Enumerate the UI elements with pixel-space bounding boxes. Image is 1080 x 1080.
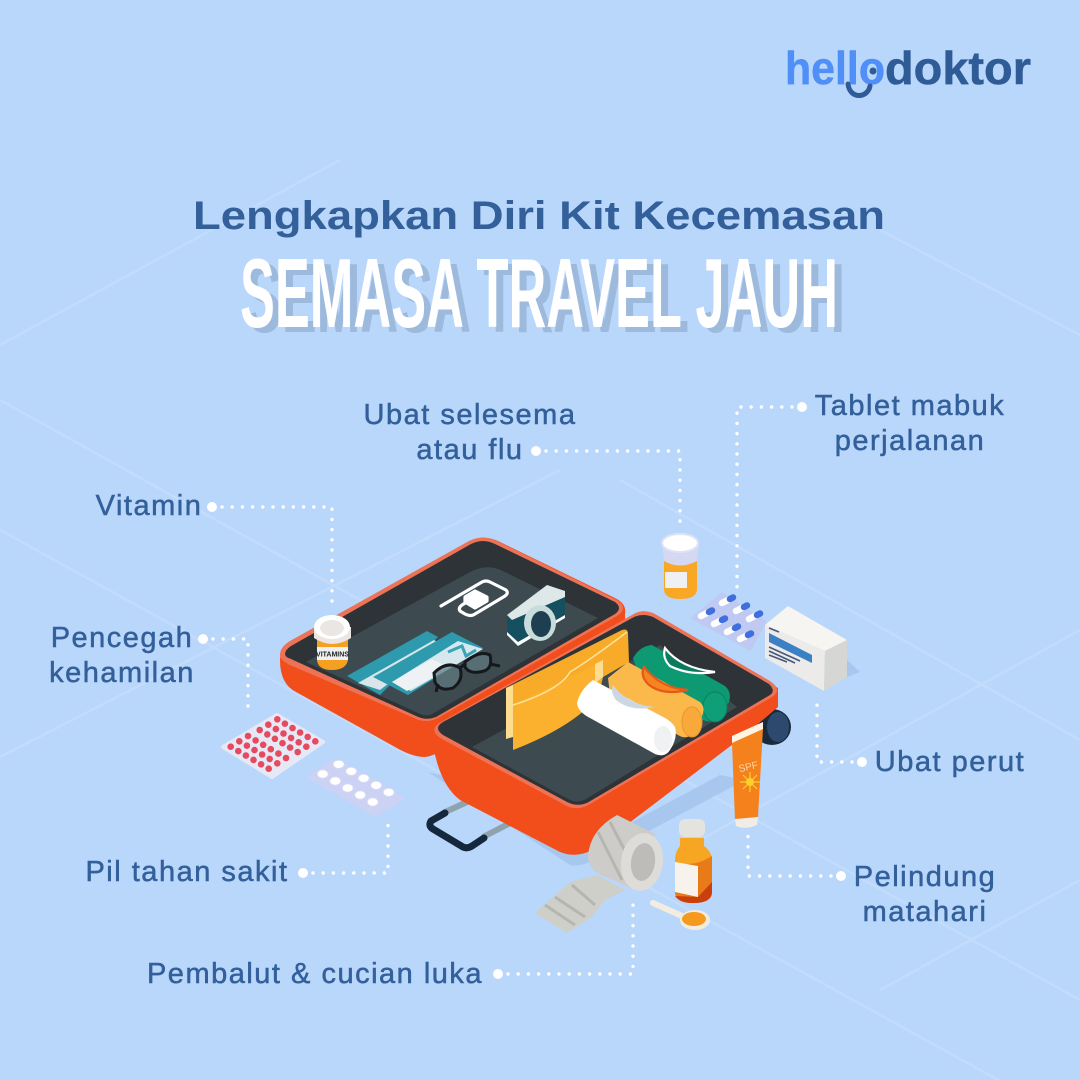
- vitamin bottle: [314, 615, 351, 670]
- label: Pencegah kehamilan: kehamilan: [49, 657, 195, 689]
- label: Pelindung matahari: Pelindung: [854, 861, 996, 893]
- motion sickness tablets: [693, 594, 765, 649]
- label: Pil tahan sakit: Pil tahan sakit: [85, 856, 289, 888]
- suitcase lid: [280, 538, 625, 757]
- suitcase shadow: [428, 772, 745, 866]
- dotted leader: Pencegah kehamilan: [198, 634, 248, 712]
- label: Ubat perut: Ubat perut: [875, 746, 1025, 778]
- dotted leader: Tablet mabuk: [737, 402, 807, 590]
- green rolled clothes: [633, 645, 730, 722]
- camera: [507, 585, 565, 646]
- label: Ubat selesema atau flu: atau flu: [416, 434, 524, 466]
- dotted leader: Ubat selesema: [531, 446, 680, 528]
- label: Pembalut & cucian luka: Pembalut & cucian luka: [147, 958, 483, 990]
- sunscreen tube: SPF: [738, 760, 759, 775]
- logo: hello: [785, 42, 885, 94]
- label: Tablet mabuk perjalanan: perjalanan: [835, 425, 985, 457]
- syrup bottle: [675, 819, 712, 903]
- vitamin bottle: VITAMINS: [316, 652, 349, 658]
- cable charger: [441, 581, 507, 616]
- dotted leader: Ubat perut: [817, 698, 867, 767]
- white rolled clothes: [577, 680, 676, 755]
- label: Ubat selesema atau flu: Ubat selesema: [364, 399, 576, 431]
- spoon: [653, 903, 710, 930]
- label: Vitamin: Vitamin: [96, 490, 202, 522]
- dotted leader: Pembalut: [493, 905, 633, 979]
- dotted leader: Pil tahan sakit: [298, 820, 388, 878]
- glasses: [434, 654, 500, 692]
- dotted leader: Pelindung matahari: [748, 832, 846, 881]
- suitcase base: [433, 611, 778, 855]
- tickets: [347, 631, 483, 695]
- contraceptive blister: [223, 715, 323, 777]
- handle: [430, 797, 520, 848]
- orange rolled clothes: [608, 662, 704, 737]
- wallet: [506, 630, 629, 750]
- logo: doktor: [885, 42, 1031, 94]
- subtitle with shadow: [240, 238, 845, 353]
- wheel: [753, 709, 791, 745]
- sunscreen tube: [732, 722, 763, 828]
- stomach medicine box: [765, 606, 860, 691]
- label: Pencegah kehamilan: Pencegah: [51, 622, 193, 654]
- pain pill blister: [308, 760, 403, 815]
- title: Lengkapkan Diri Kit Kecemasan: [193, 194, 885, 238]
- bandage roll: [535, 815, 667, 933]
- dotted leader: Vitamin: [207, 502, 332, 610]
- logo: [785, 42, 1031, 96]
- label: Pelindung matahari: matahari: [863, 896, 987, 928]
- flu medicine bottle: [662, 534, 699, 599]
- label: Tablet mabuk perjalanan: Tablet mabuk: [815, 390, 1005, 422]
